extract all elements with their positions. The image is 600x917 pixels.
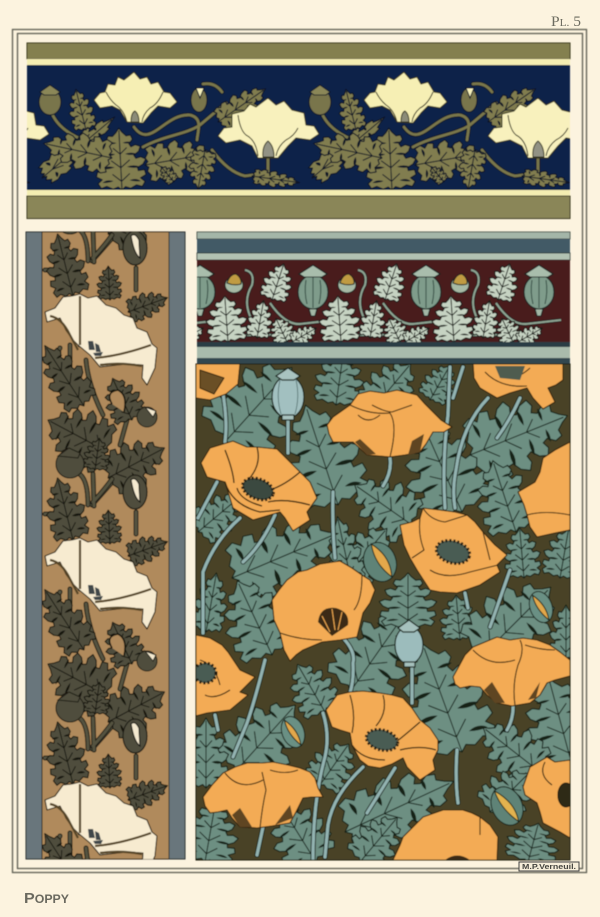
maroon ornament <box>196 263 562 343</box>
slate line <box>197 342 570 347</box>
flower right partial <box>518 442 570 537</box>
grey strip left <box>26 232 42 859</box>
flower centre right <box>400 508 507 593</box>
flower top centre <box>327 390 452 457</box>
cream top line <box>27 59 570 65</box>
olive bottom bar <box>27 196 570 218</box>
light top bar <box>197 232 570 239</box>
flower right lower <box>523 757 574 838</box>
light bar <box>197 347 570 358</box>
leaves <box>196 364 570 860</box>
dark ground <box>196 364 570 860</box>
panel: top navy border <box>0 43 589 218</box>
light second bar <box>197 253 570 260</box>
bud right <box>528 590 554 624</box>
flower bottom <box>392 810 498 862</box>
bud lower left <box>280 716 306 748</box>
flower centre big <box>272 561 375 661</box>
cream bottom line <box>27 190 570 196</box>
seed pod lower <box>395 620 423 667</box>
tan band <box>42 232 169 859</box>
tan band ornament <box>42 231 168 860</box>
grey strip right <box>169 232 185 859</box>
flower top left <box>196 364 240 400</box>
panel: left vertical border <box>24 230 186 860</box>
flower left middle <box>194 635 255 716</box>
signature box: M.P.Verneuil. <box>522 862 576 871</box>
bud lower right <box>490 786 524 826</box>
slate lower <box>197 358 570 364</box>
navy band <box>27 65 570 190</box>
flower centre lower <box>326 691 438 780</box>
seed pod upper <box>272 368 304 420</box>
stems dark <box>198 367 520 860</box>
flower left large <box>201 441 317 531</box>
flower top right <box>473 364 563 409</box>
maroon band <box>197 260 570 342</box>
caption: POPPY <box>24 890 69 907</box>
flower lower left <box>203 762 323 828</box>
flower right middle <box>453 637 570 706</box>
panel: main poppy pattern <box>196 364 570 860</box>
bud centre <box>362 541 398 582</box>
slate bar <box>197 239 570 253</box>
plate number: PL. 5 <box>551 14 581 30</box>
flowers <box>194 364 574 862</box>
stems light <box>198 367 520 860</box>
olive top bar <box>27 43 570 59</box>
navy band ornament <box>0 72 589 192</box>
pattern border <box>196 364 570 860</box>
panel: maroon border <box>196 230 572 364</box>
